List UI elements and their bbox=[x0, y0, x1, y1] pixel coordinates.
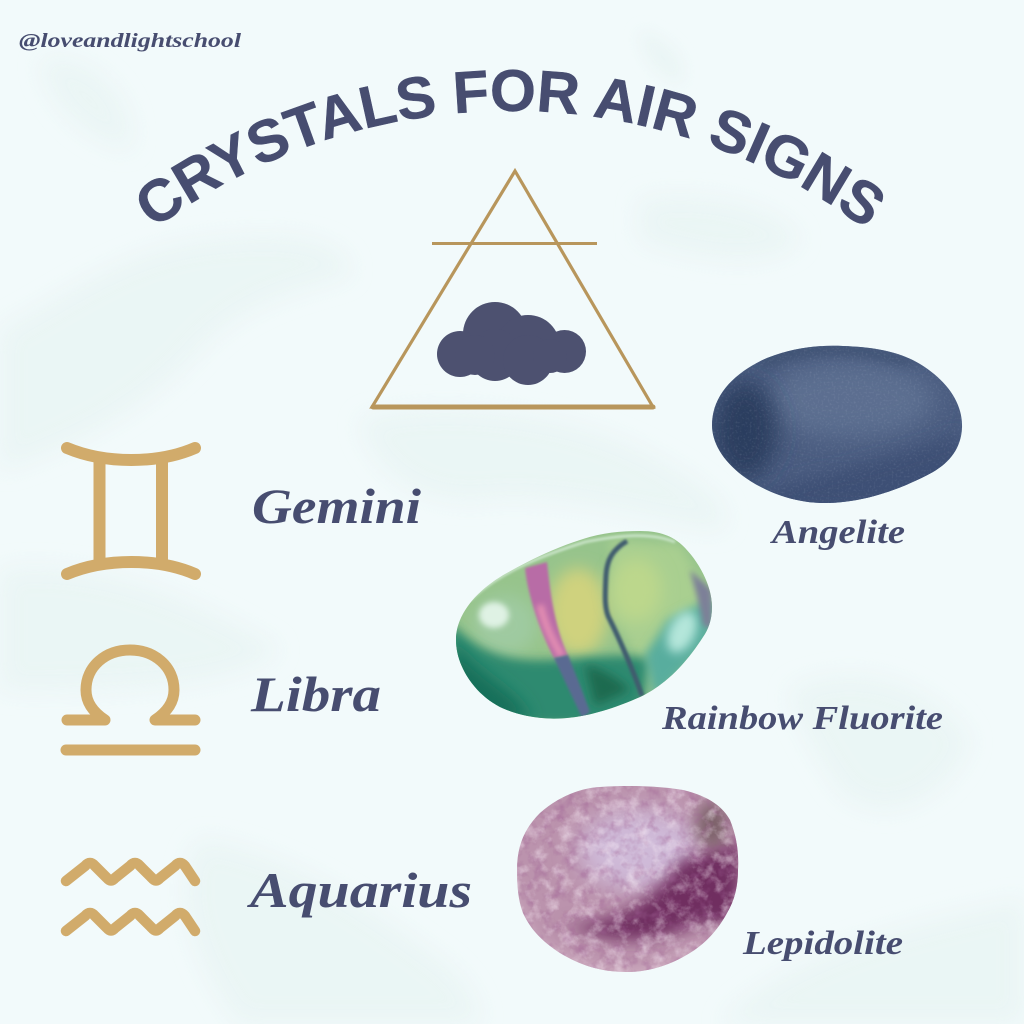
crystal: Lepidolite bbox=[517, 786, 738, 972]
icon: cloud bbox=[437, 302, 586, 385]
label: Gemini: Gemini bbox=[252, 478, 421, 534]
label: Aquarius: Aquarius bbox=[247, 862, 472, 918]
icon: Aquarius symbol bbox=[66, 863, 195, 931]
icon: Gemini symbol bbox=[67, 448, 195, 574]
label: Lepidolite: Lepidolite bbox=[742, 925, 903, 962]
label: Rainbow Fluorite: Rainbow Fluorite bbox=[661, 700, 943, 737]
icon: air element triangle with cloud bbox=[372, 171, 653, 407]
crystal: Rainbow Fluorite bbox=[456, 531, 712, 719]
label: Angelite: Angelite bbox=[770, 514, 905, 551]
handle: @loveandlightschool bbox=[19, 30, 242, 52]
label: Libra: Libra bbox=[250, 666, 381, 722]
icon: Libra symbol bbox=[66, 650, 195, 750]
crystal: Angelite bbox=[712, 346, 962, 503]
title: CRYSTALS FOR AIR SIGNS bbox=[138, 69, 884, 224]
